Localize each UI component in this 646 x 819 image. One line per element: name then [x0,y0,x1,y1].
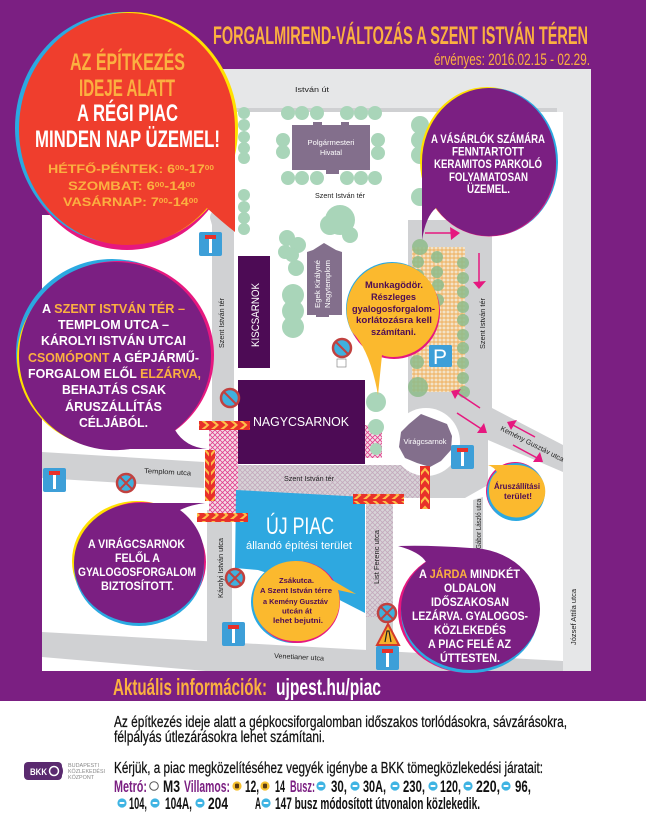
street labels: Szent István tér [284,476,335,483]
BKK logo: BUDAPESTI [68,763,99,769]
callout: opening hours: 00 [175,165,184,172]
callout: opening hours: VASÁRNAP: 7 [63,195,143,209]
street labels: Kemény Gusztáv utca [499,426,565,464]
callout: excavation pit: korlátozásra kell [356,315,432,326]
street labels: Szent István tér [480,297,487,349]
building: Kiscsarnok: KISCSARNOK [250,282,262,347]
callout: opening hours: MINDEN NAP ÜZEMEL! [35,126,220,153]
public transport text: 14 [275,777,285,796]
callout: pavement closed: A PIAC FELÉ AZ [428,638,511,651]
building: Polgármesteri Hivatal: Polgármesteri [308,138,355,147]
Virágcsarnok building: Virágcsarnok [404,439,447,446]
parking sign [429,345,452,369]
public transport text: 120, [440,777,461,796]
building: Kiscsarnok [238,256,270,368]
public transport text: Villamos: [184,777,230,796]
callout: ceramic parking: KERAMITOS PARKOLÓ [434,158,542,171]
callout: delivery area: Áruszállítási [494,481,540,491]
callout: closed junction [16,259,214,450]
pink direction arrows [425,227,543,462]
callout: opening hours: 00 [155,182,164,189]
BKK logo: KÖZPONT [68,774,94,781]
callout: ceramic parking: ÜZEMEL. [467,183,510,196]
callout: closed junction: FORGALOM ELŐL ELZÁRVA, [28,366,201,381]
street labels: István út [295,87,329,94]
BKK logo: KÖZLEKEDÉSI [68,768,105,775]
street labels: Szent István tér [315,193,366,200]
street labels: List Ferenc utca [374,530,381,584]
Új piac construction area: ÚJ PIAC [266,513,334,540]
building: Nagytemplom: Nagytemplom [323,260,332,308]
construction notice text [114,714,567,746]
callout: opening hours: -17 [184,162,205,176]
public transport text: 12, [245,777,259,796]
construction notice text: félpályás útlezárásokra lehet számítani. [114,729,325,746]
callout: opening hours: 00 [189,198,198,205]
callout: opening hours: A RÉGI PIAC [77,99,178,127]
street labels: Szent István tér [219,297,226,348]
public transport text: 96, [515,777,531,796]
callout: opening hours: AZ ÉPÍTKEZÉS [70,48,185,76]
public transport text: M3 [163,777,180,796]
callout: opening hours: IDEJE ALATT [79,75,175,102]
building: Nagytemplom [307,243,342,317]
building: Nagytemplom: Egek Királyné [313,260,322,308]
roads [42,209,563,671]
street labels [144,87,578,663]
callout: delivery area: terület! [504,491,532,501]
callout: ceramic parking [420,87,558,240]
public transport text: A [255,794,261,813]
callout: excavation pit: Munkagödör. [365,280,423,291]
road signs [43,232,474,670]
callout: delivery area [486,462,545,521]
callout: opening hours: -14 [168,195,189,209]
callout: dead end: lehet bejutni. [273,616,323,625]
public transport text: 30, [331,777,347,796]
public transport text [114,760,543,813]
callout: opening hours [15,12,238,250]
map panel [42,69,591,671]
callout: closed junction: CSOMÓPONT A GÉPJÁRMŰ- [28,350,199,365]
callout: dead end: A Szent István térre [260,586,332,595]
BKK logo: BKK [30,767,47,777]
callout: pavement closed: OLDALON [444,583,496,595]
callout: pavement closed: ÚTTESTEN. [440,652,500,665]
public transport text: Metró: [114,777,147,796]
callout: dead end: utcán át [282,606,313,616]
callout: closed junction: BEHAJTÁS CSAK [62,382,166,397]
callout: ceramic parking: A VÁSÁRLÓK SZÁMÁRA [431,133,545,146]
public transport text: 230, [403,777,425,796]
callout: Virágcsarnok: A VIRÁGCSARNOK [88,538,186,551]
building: Polgármesteri Hivatal: Hivatal [320,148,342,157]
street labels: Gábor László utca [476,499,483,549]
street labels: Templom utca [144,468,191,477]
callout: opening hours: -14 [164,179,186,193]
callout: pavement closed: A JÁRDA MINDKÉT [419,568,520,581]
Virágcsarnok building [392,408,460,476]
Új piac construction area [235,490,365,613]
white footer [0,701,646,819]
callout: Virágcsarnok: GYALOGOSFORGALOM [78,567,196,579]
callout: opening hours: SZOMBAT: 6 [68,179,139,193]
callout: pavement closed: LEZÁRVA. GYALOGOS- [412,610,528,623]
callout: ceramic parking: FOLYAMATOSAN [449,172,528,184]
callout: excavation pit: számítani. [371,327,416,338]
public transport text: 204 [208,794,228,813]
street labels: József Attila utca [571,589,578,645]
hatched closed zones [209,425,420,617]
callout: Virágcsarnok [72,501,206,626]
callout: Virágcsarnok: BIZTOSÍTOTT. [101,580,174,593]
callout: dead end [251,561,356,643]
callout: closed junction: TEMPLOM UTCA – [58,318,169,332]
traffic barriers [197,421,430,522]
public transport text: 220, [476,777,500,796]
callout: closed junction: KÁROLYI ISTVÁN UTCAI [41,333,186,348]
public transport text: 104, [129,794,147,813]
street labels: Károlyi István utca [218,538,225,598]
callout: opening hours: 00 [159,198,168,205]
public transport text: 147 busz módosított útvonalon közlekedik. [275,794,480,813]
public transport text: 30A, [363,777,386,796]
callout: excavation pit: Részleges [371,292,416,303]
callout: ceramic parking: FENNTARTOTT [452,146,524,158]
parking area [412,247,465,392]
callout: closed junction: A SZENT ISTVÁN TÉR – [42,301,185,316]
street labels: Venetianer utca [274,653,324,663]
callout: pavement closed: KÖZLEKEDÉS [434,624,506,637]
callout: opening hours: 00 [205,165,214,172]
building: Nagycsarnok: NAGYCSARNOK [253,414,349,429]
Új piac construction area: állandó építési terület [246,540,352,552]
green trees [238,106,429,455]
callout: closed junction: CÉLJÁBÓL. [79,415,148,430]
callout: excavation pit: gyalogosforgalom- [352,304,435,315]
building: Polgármesteri Hivatal [292,122,370,174]
callout: opening hours: HÉTFŐ-PÉNTEK: 6 [48,162,155,176]
callout: pavement closed [398,546,540,673]
parking sign: P [433,346,447,369]
callout: dead end: Zsákutca. [279,576,314,585]
callout: excavation pit [346,262,440,395]
public transport text: Busz: [290,777,315,796]
current information link: Aktuális információk: [113,674,267,700]
BKK logo [24,762,105,781]
callout: dead end: a Kemény Gusztáv [263,597,329,606]
callout: opening hours: 00 [185,182,195,189]
current information link: ujpest.hu/piac [276,674,381,700]
callout: Virágcsarnok: FELŐL A [115,552,160,565]
public transport text: 104A, [165,794,192,813]
building: Nagycsarnok [238,380,365,464]
callout: closed junction: ÁRUSZÁLLÍTÁS [65,399,162,414]
callout: pavement closed: IDŐSZAKOSAN [431,596,509,609]
